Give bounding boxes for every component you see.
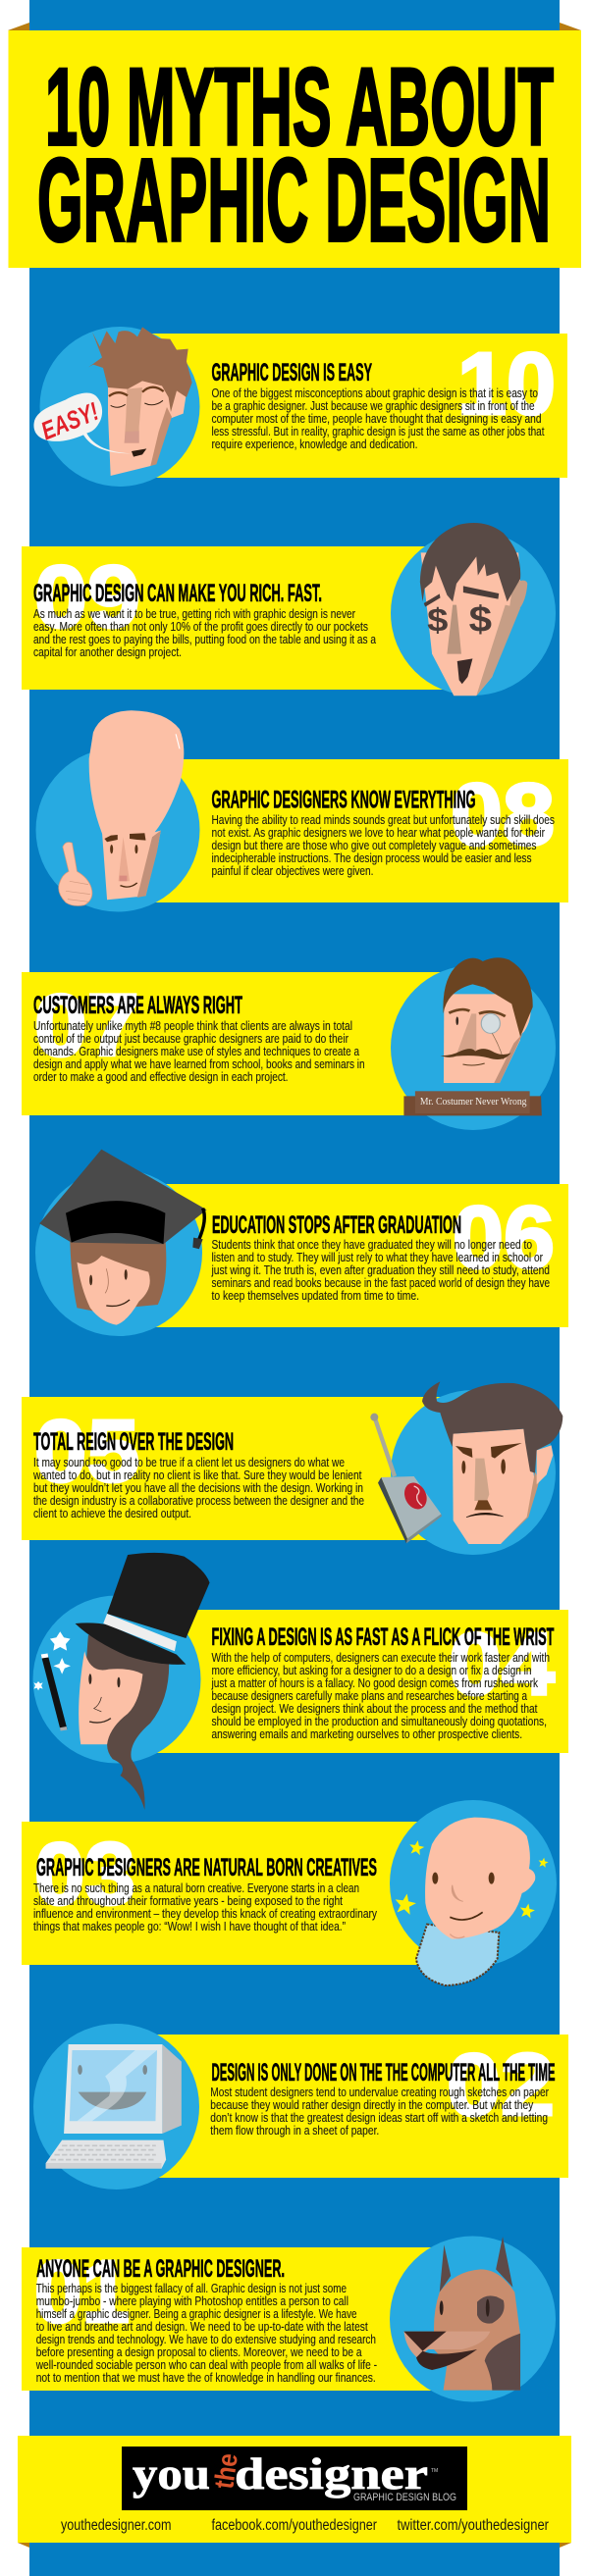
panel: myth 07 bbox=[22, 957, 556, 1130]
title banner bbox=[8, 23, 581, 268]
panel: myth 03: There is no such thing as a natural born creative. Everyone starts in a clean bbox=[33, 1881, 359, 1895]
panel: myth 03: things that makes people go: “Wow! I wish I have thought of that idea.” bbox=[33, 1920, 346, 1933]
panel: myth 08 bbox=[35, 710, 568, 912]
footer banner bbox=[18, 2436, 571, 2548]
panel: myth 01: This perhaps is the biggest fallacy of all. Graphic design is not just some bbox=[36, 2282, 347, 2295]
panel: myth 06: to keep themselves updated from time to time. bbox=[212, 1289, 419, 1303]
panel: myth 05: but they wouldn’t let you have all the decisions with the design. Working in bbox=[33, 1481, 363, 1495]
panel: myth 05: 05 bbox=[34, 1403, 139, 1501]
logo: you the designer: you bbox=[133, 2448, 210, 2499]
panel: myth 07: CUSTOMERS ARE ALWAYS RIGHT bbox=[33, 992, 242, 1019]
panel: myth 09: and the rest goes to paying the bills, putting food on the table and using it as a bbox=[33, 633, 376, 646]
panel: myth 02 bbox=[33, 2024, 568, 2190]
panel: myth 07: 07 bbox=[34, 977, 139, 1075]
panel: myth 01: 01 bbox=[34, 2243, 130, 2342]
panel: myth 03 bbox=[22, 1800, 557, 1985]
panel: myth 09: GRAPHIC DESIGN CAN MAKE YOU RICH. FAST. bbox=[33, 580, 322, 607]
panel: myth 01: to live and breathe art and design. We need to be up-to-date with the latest bbox=[36, 2320, 368, 2334]
logo: you the designer bbox=[122, 2447, 467, 2510]
footer links bbox=[61, 2517, 549, 2534]
panel: myth 08: painful if clear objectives were given. bbox=[212, 864, 373, 878]
panel: myth 09: capital for another design project. bbox=[33, 645, 182, 659]
panel: myth 01: well-rounded sociable person who can deal with people from all walks of life - bbox=[35, 2358, 377, 2372]
panel: myth 07: Mr. Costumer Never Wrong bbox=[420, 1097, 527, 1108]
panel: myth 09: $ bbox=[469, 599, 492, 640]
panel: myth 03: 03 bbox=[34, 1826, 135, 1924]
panel: myth 02: 02 bbox=[447, 2036, 555, 2135]
panel: myth 01: not to mention that we must have the of knowledge in handling our finances. bbox=[36, 2371, 376, 2385]
footer links: youthedesigner.com bbox=[61, 2517, 171, 2534]
panel: myth 04: 04 bbox=[449, 1616, 555, 1714]
panel: myth 09: 09 bbox=[34, 548, 140, 646]
panel: myth 07: control of the output just because graphic designers are paid to do their bbox=[33, 1032, 348, 1046]
panel: myth 01: before presenting a design proposal to clients. Moreover, we need to be a bbox=[36, 2345, 362, 2359]
panel: myth 07: Unfortunately unlike myth #8 people think that clients are always in total bbox=[33, 1019, 352, 1033]
panel: myth 09: As much as we want it to be true, getting rich with graphic design is never bbox=[33, 607, 355, 621]
panel: myth 01: himself a graphic designer. Being a graphic designer is a lifestyle. We have bbox=[36, 2307, 357, 2321]
panel: myth 07: design and apply what we have learned from school, books and seminars in bbox=[33, 1057, 365, 1071]
panel: myth 02: them flow through in a sheet of paper. bbox=[210, 2124, 379, 2138]
panel: myth 09: $ bbox=[427, 602, 448, 639]
panel: myth 07: demands. Graphic designers make use of styles and techniques to create a bbox=[33, 1045, 359, 1058]
panel: myth 06: 06 bbox=[453, 1189, 555, 1287]
panel: myth 07: order to make a good and effective design in each project. bbox=[33, 1070, 289, 1084]
panel: myth 03: slate and throughout their formative years - being exposed to the right bbox=[33, 1894, 343, 1908]
panel: myth 06 bbox=[35, 1150, 568, 1336]
logo: you the designer: the bbox=[208, 2451, 243, 2491]
panel: myth 10: 10 bbox=[457, 335, 556, 434]
logo: you the designer: TM bbox=[431, 2468, 438, 2474]
logo: you the designer: designer bbox=[235, 2448, 428, 2499]
panel: myth 05: TOTAL REIGN OVER THE DESIGN bbox=[33, 1428, 234, 1456]
panel: myth 05 bbox=[22, 1381, 562, 1555]
panel: myth 09: easy. More often than not only 10% of the profit goes directly to our pockets bbox=[33, 620, 368, 634]
footer links: facebook.com/youthedesigner bbox=[212, 2517, 377, 2534]
panel: myth 05: It may sound too good to be true if a client let us designers do what we bbox=[33, 1456, 345, 1469]
panel: myth 10: EASY! bbox=[37, 396, 103, 445]
panel: myth 10: GRAPHIC DESIGN IS EASY bbox=[212, 359, 372, 386]
panel: myth 10: require experience, knowledge and dedication. bbox=[212, 438, 418, 451]
panel: myth 08: 08 bbox=[451, 766, 555, 864]
panel: myth 09 bbox=[22, 523, 556, 696]
panel: myth 10 bbox=[33, 327, 567, 487]
panel: myth 05: wanted to do, but in reality no client is like that. Sure they would be lenient bbox=[32, 1468, 362, 1482]
panel: myth 04: answering emails and marketing ourselves to other prospective clients. bbox=[212, 1727, 522, 1741]
panel: myth 01: mumbo-jumbo - where playing with Photoshop entitles a person to call bbox=[36, 2294, 348, 2308]
panel: myth 01: design trends and technology. We have to do extensive studying and research bbox=[36, 2333, 376, 2346]
panel: myth 05: client to achieve the desired output. bbox=[33, 1507, 191, 1520]
panel: myth 05: the design industry is a collaborative process between the designer and the bbox=[33, 1494, 364, 1508]
panel: myth 01 bbox=[22, 2237, 556, 2401]
panel: myth 04 bbox=[33, 1553, 568, 1810]
panel: myth 01: ANYONE CAN BE A GRAPHIC DESIGNER. bbox=[36, 2255, 285, 2283]
panel: myth 03: influence and environment – they develop this knack of creating extraordinary bbox=[33, 1907, 378, 1921]
footer links: twitter.com/youthedesigner bbox=[397, 2517, 549, 2534]
logo: you the designer: GRAPHIC DESIGN BLOG bbox=[353, 2492, 456, 2503]
